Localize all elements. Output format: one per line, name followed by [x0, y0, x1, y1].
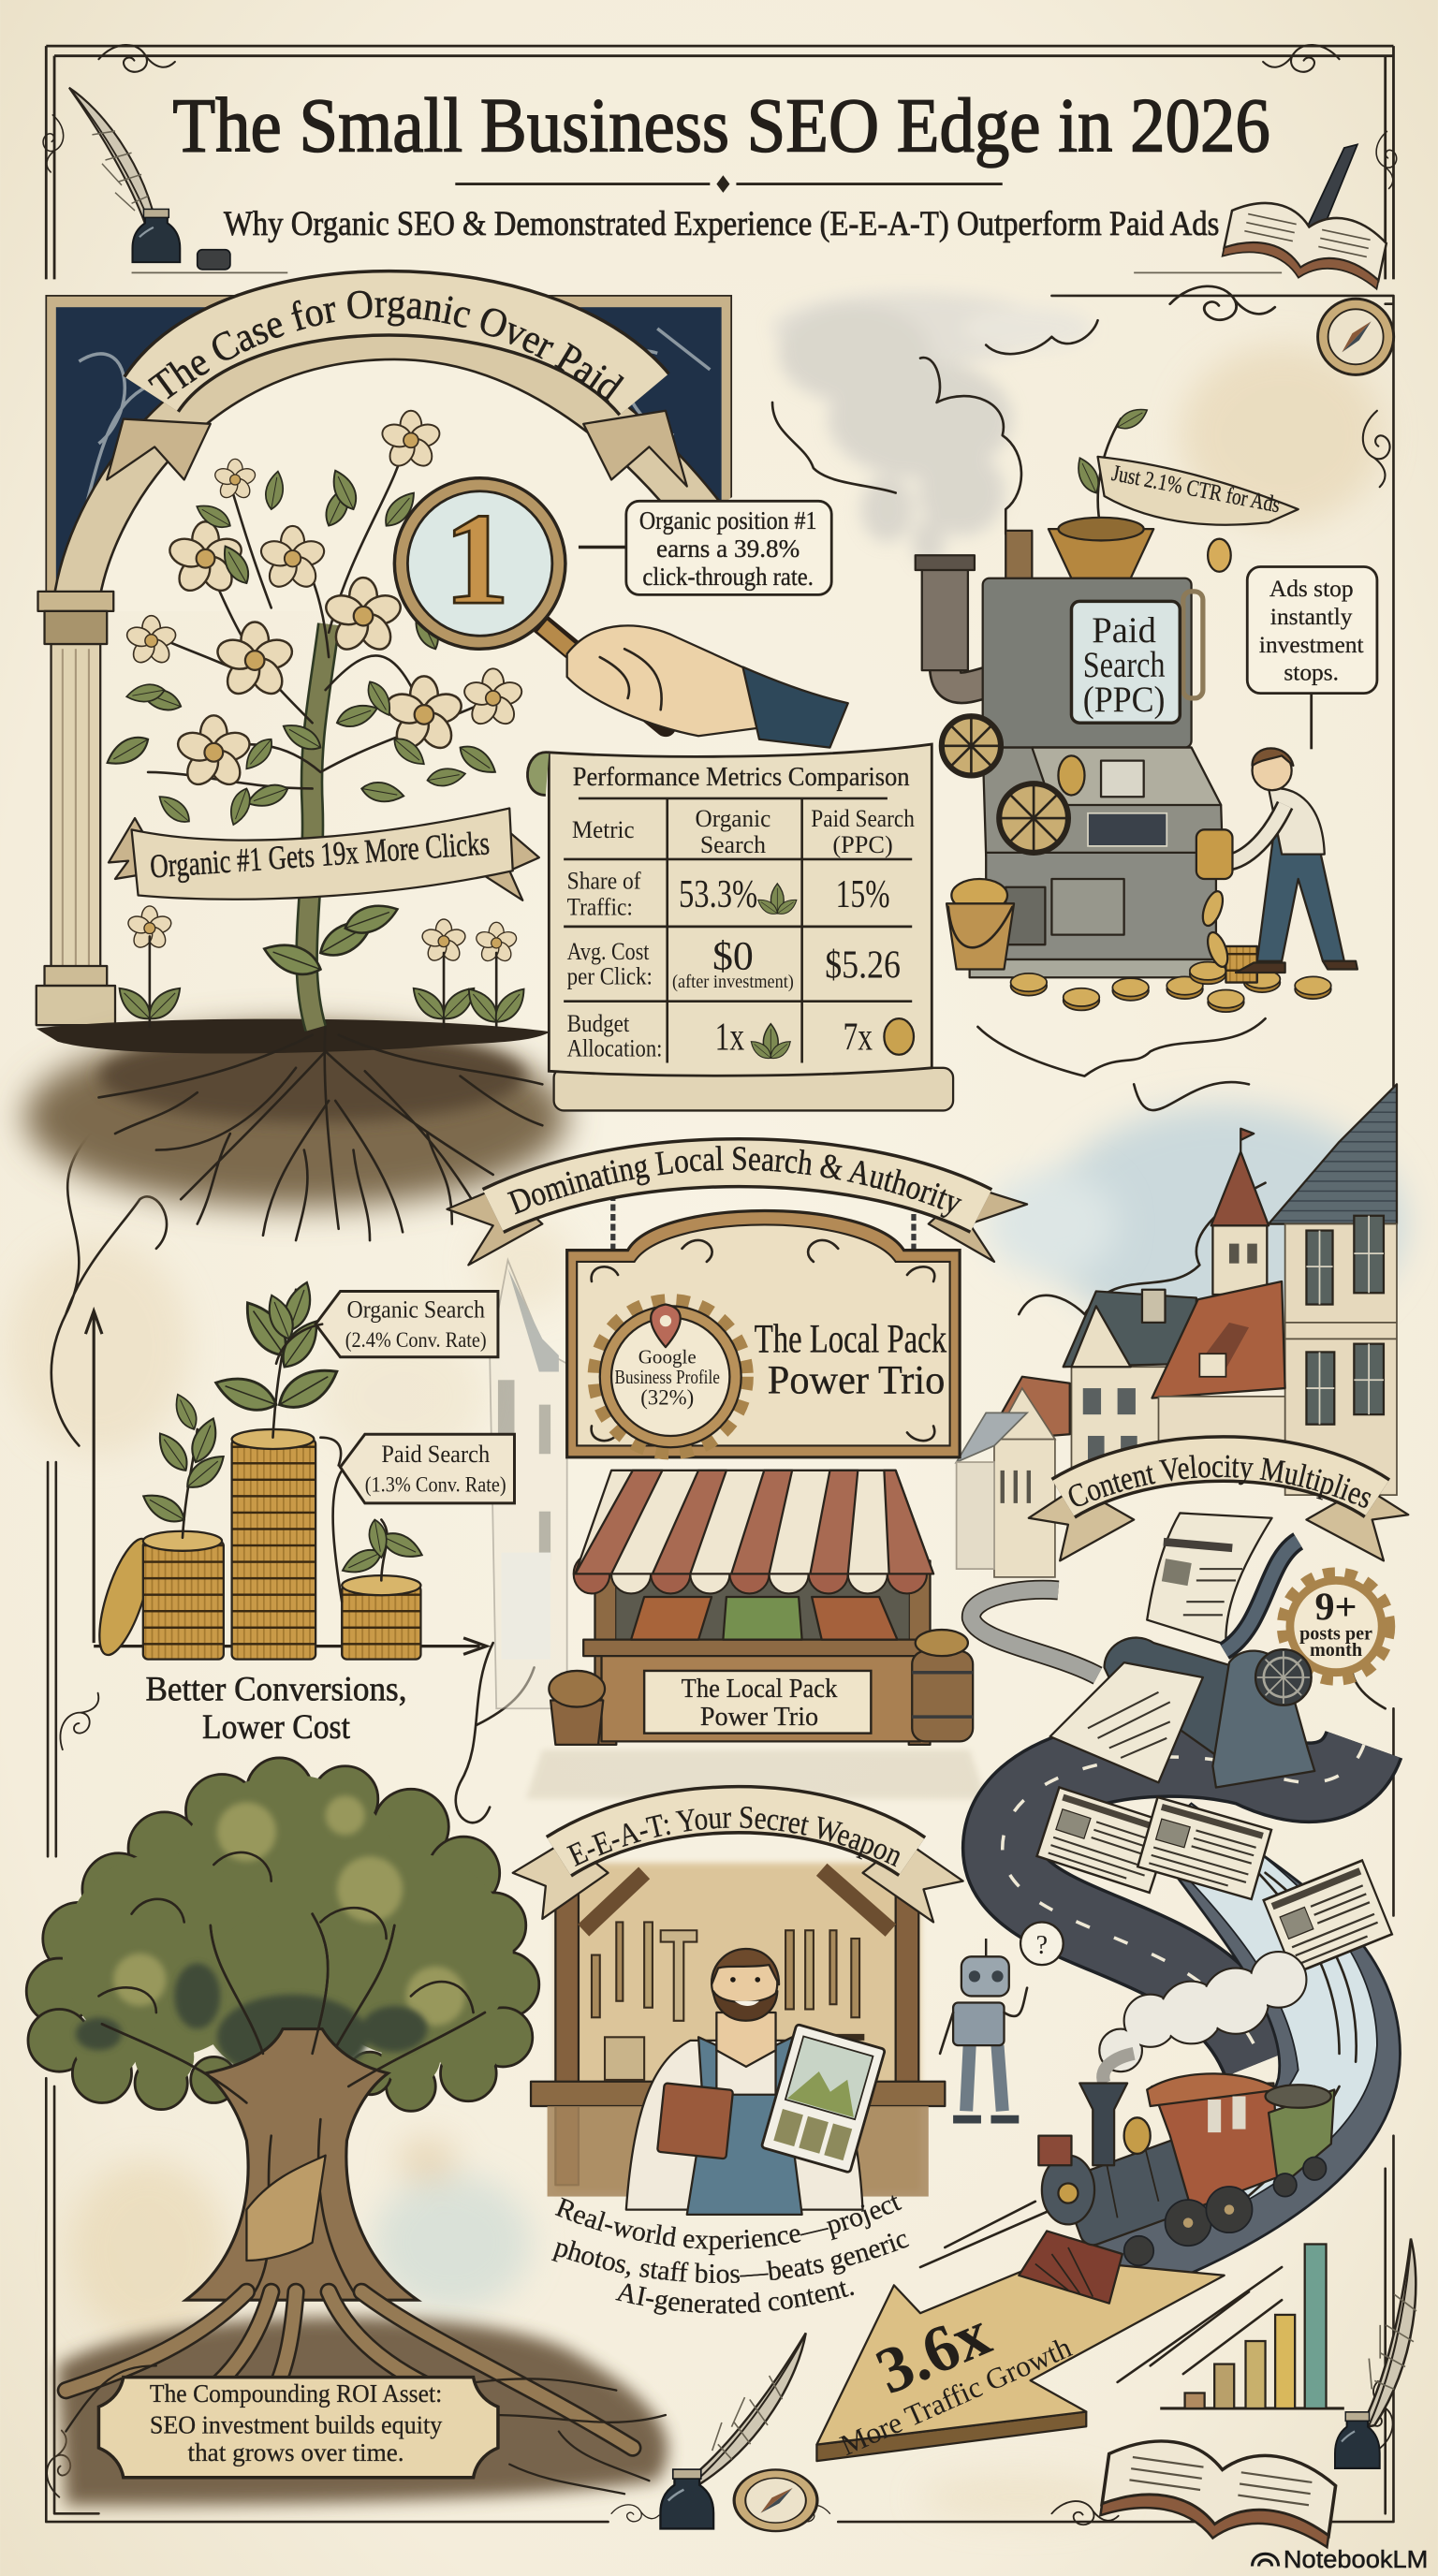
row: share of traffic: Share of	[567, 868, 641, 895]
sign board	[567, 1211, 960, 1457]
gear: 9+ posts per month: month	[1310, 1640, 1362, 1661]
locomotive smoke	[1099, 1952, 1306, 2083]
gear: google business profile: (32%)	[640, 1386, 694, 1410]
roots	[66, 2291, 666, 2494]
table headers: Paid Search	[811, 805, 915, 832]
banner: just 2.1% ctr for ads	[1072, 403, 1299, 529]
icon: quill and inkwell bottom centre	[653, 2333, 843, 2528]
smoke	[772, 292, 1098, 565]
cobblestones	[526, 1749, 986, 1799]
banner: content velocity multiplies: Content Velocity Multiplies	[1069, 1455, 1371, 1508]
tag: paid search: Paid Search	[381, 1441, 490, 1468]
market stall	[549, 1471, 973, 1745]
faded street left of stall	[490, 1260, 567, 1708]
callout: ads stop: stops.	[1284, 659, 1339, 686]
curved caption: real-world experience: Real-world experience—project	[554, 2195, 902, 2256]
callout: ads stop	[1247, 567, 1377, 749]
steam locomotive	[1019, 2073, 1334, 2304]
town scene	[490, 1018, 1405, 1799]
callout: ads stop: instantly	[1270, 603, 1353, 630]
table headers: Search	[700, 831, 766, 858]
divider	[455, 178, 1003, 191]
arrow: 3.6x more traffic growth: 3.6x	[866, 2296, 1001, 2408]
banner: dominating local search & authority: Dominating Local Search & Authority	[507, 1146, 962, 1218]
town road	[971, 1589, 1098, 1676]
callout: ads stop: investment	[1259, 631, 1364, 658]
machine	[916, 518, 1231, 977]
sky wash and clouds	[977, 1018, 1405, 1342]
banner: the case for organic over paid	[106, 270, 688, 488]
panel: dominating local search & authority	[446, 1137, 1028, 1746]
logo: notebooklm: NotebookLM	[1284, 2545, 1428, 2573]
row: budget allocation: 7x	[844, 1016, 873, 1060]
craftsman	[626, 1949, 885, 2215]
arrow: 3.6x more traffic growth	[816, 2202, 1282, 2462]
row: average cost per click: $0	[712, 934, 754, 979]
banner: e-e-a-t your secret weapon: E-E-A-T: Your Secret Weapon	[566, 1807, 900, 1866]
row: average cost per click: Avg. Cost	[567, 938, 650, 965]
portfolio tablet	[761, 2024, 885, 2173]
organic plant with flowers	[102, 411, 531, 1029]
callout: organic position #1: click-through rate.	[642, 563, 814, 591]
panel: paid search machine	[772, 292, 1394, 1012]
arch with navy spandrels	[46, 296, 742, 611]
row: average cost per click: $5.26	[825, 943, 901, 987]
callout: organic position #1	[579, 501, 831, 594]
townhouse right	[1269, 1084, 1397, 1495]
baskets and barrel	[549, 1630, 973, 1745]
row: share of traffic: 53.3%	[679, 872, 757, 916]
stall label: The Local Pack	[682, 1674, 838, 1704]
plaque: compounding roi asset: SEO investment builds equity	[150, 2410, 443, 2438]
axes	[85, 1311, 487, 1654]
table headers: (PPC)	[832, 831, 893, 858]
curved caption: real-world experience: photos, staff bios—beats generic	[550, 2233, 910, 2284]
canopy	[26, 1758, 539, 2111]
row: budget allocation: 1x	[715, 1016, 744, 1060]
banner: just 2.1% ctr for ads: Just 2.1% CTR for Ads	[1109, 461, 1283, 518]
machine: Paid	[1092, 611, 1156, 651]
hand holding the glass	[567, 625, 848, 748]
table headers: Metric	[572, 816, 635, 843]
hanging chains	[613, 1175, 914, 1265]
gear: google business profile	[594, 1299, 748, 1454]
header: title block	[69, 82, 1389, 294]
icon: open book and pen	[1134, 144, 1389, 294]
machine: (PPC)	[1083, 681, 1166, 720]
subtitle: Why Organic SEO & Demonstrated Experience (E-E-A-T) Outperform Paid Ads	[224, 204, 1219, 242]
workshop frame	[531, 1856, 945, 2197]
soil under the oak	[58, 2317, 668, 2506]
sign text: Power Trio	[768, 1357, 945, 1402]
row: average cost per click: (after investment)	[672, 972, 794, 992]
arrow: 3.6x more traffic growth: More Traffic Growth	[835, 2331, 1077, 2462]
gear: google business profile: Google	[638, 1346, 697, 1368]
banner: organic #1 gets 19x more clicks	[109, 809, 539, 900]
title: The Small Business SEO Edge in 2026	[172, 82, 1270, 168]
plaque: compounding roi asset: that grows over time.	[188, 2438, 404, 2466]
callout: organic position #1: earns a 39.8%	[656, 534, 800, 563]
robot with question bubble	[940, 1922, 1064, 2119]
decorative writing tools at bottom	[653, 2239, 1438, 2554]
trunk and branches	[102, 1914, 485, 2300]
sign text	[755, 1316, 946, 1402]
gear: 9+ posts per month: 9+	[1315, 1586, 1357, 1630]
callout: organic position #1: Organic position #1	[639, 506, 816, 534]
icon: compass top right	[1318, 299, 1394, 374]
gear: google business profile: Business Profile	[615, 1366, 720, 1388]
icon: quill and inkwell	[69, 88, 287, 272]
chart: better conversions, lower cost	[85, 1279, 514, 1746]
hanging tools	[592, 1922, 864, 2080]
row: average cost per click	[567, 934, 901, 992]
curved caption: real-world experience	[550, 2195, 910, 2315]
plaque: compounding roi asset	[98, 2378, 498, 2478]
table headers	[572, 805, 915, 858]
gear: 9+ posts per month: posts per	[1299, 1624, 1372, 1645]
sign text: The Local Pack	[755, 1316, 946, 1361]
banner: dominating local search & authority	[446, 1137, 1028, 1266]
magnifying glass with number 1	[394, 478, 666, 726]
icon: quill and inkwell bottom right	[1291, 2239, 1438, 2468]
table: performance metrics comparison	[527, 744, 953, 1110]
magnifying glass with number 1: 1	[444, 487, 509, 632]
printing press	[1050, 1513, 1314, 1788]
panel: e-e-a-t workshop	[511, 1784, 1064, 2315]
column	[37, 592, 115, 1025]
tag: organic search	[276, 1292, 498, 1364]
row: budget allocation: Budget	[567, 1010, 630, 1037]
curved caption: real-world experience: AI-generated content.	[615, 2281, 854, 2315]
soil and roots	[24, 1019, 567, 1240]
table heading: Performance Metrics Comparison	[573, 763, 910, 792]
panel: the case for organic over paid	[3, 270, 849, 1241]
tag: organic search: Organic Search	[346, 1296, 485, 1324]
row: share of traffic: 15%	[836, 872, 890, 916]
church tower	[1211, 1129, 1269, 1295]
row: share of traffic	[567, 868, 890, 921]
tag: paid search	[320, 1434, 514, 1602]
chart caption: Lower Cost	[202, 1707, 351, 1746]
awning	[574, 1471, 933, 1593]
banner: content velocity multiplies	[1028, 1435, 1410, 1561]
bar chart: traffic growth	[1160, 2244, 1344, 2408]
banner: the case for organic over paid: The Case for Organic Over Paid	[148, 290, 624, 402]
produce crates	[631, 1597, 897, 1640]
gear: 9+ posts per month	[1284, 1573, 1388, 1679]
banner: organic #1 gets 19x more clicks: Organic #1 Gets 19x More Clicks	[149, 824, 491, 886]
newspapers	[1037, 1787, 1392, 1974]
stall label: Power Trio	[700, 1702, 818, 1732]
stall sign	[644, 1671, 871, 1734]
coin bucket	[946, 879, 1014, 970]
table headers: Organic	[696, 805, 770, 832]
worried man feeding coins	[1196, 748, 1357, 973]
spilled coins	[1011, 888, 1331, 1012]
coin stacks	[89, 1429, 420, 1661]
icon: open book bottom right	[1099, 2434, 1339, 2554]
road and traffic stream	[1003, 1745, 1400, 2324]
callout: ads stop: Ads stop	[1269, 575, 1354, 602]
chart caption: Better Conversions,	[145, 1670, 407, 1708]
plaque: compounding roi asset: The Compounding ROI Asset:	[150, 2379, 442, 2408]
gabled houses	[957, 1281, 1285, 1577]
machine: Search	[1083, 646, 1166, 685]
row: share of traffic: Traffic:	[567, 894, 633, 921]
banner: e-e-a-t your secret weapon	[511, 1784, 964, 1924]
icon: compass bottom centre	[734, 2469, 817, 2531]
panel: content velocity multiplies	[815, 1435, 1410, 2462]
book held by craftsman	[657, 2083, 733, 2159]
tag: organic search: (2.4% Conv. Rate)	[345, 1328, 487, 1353]
row: budget allocation	[567, 1010, 914, 1062]
tag: paid search: (1.3% Conv. Rate)	[365, 1473, 506, 1498]
workshop wall	[555, 1863, 920, 2191]
row: budget allocation: Allocation:	[567, 1035, 662, 1062]
robot with question bubble: ?	[1036, 1931, 1048, 1960]
sprouts	[139, 1279, 426, 1580]
row: average cost per click: per Click:	[567, 962, 653, 989]
oak tree: compounding roi asset	[26, 1758, 668, 2506]
